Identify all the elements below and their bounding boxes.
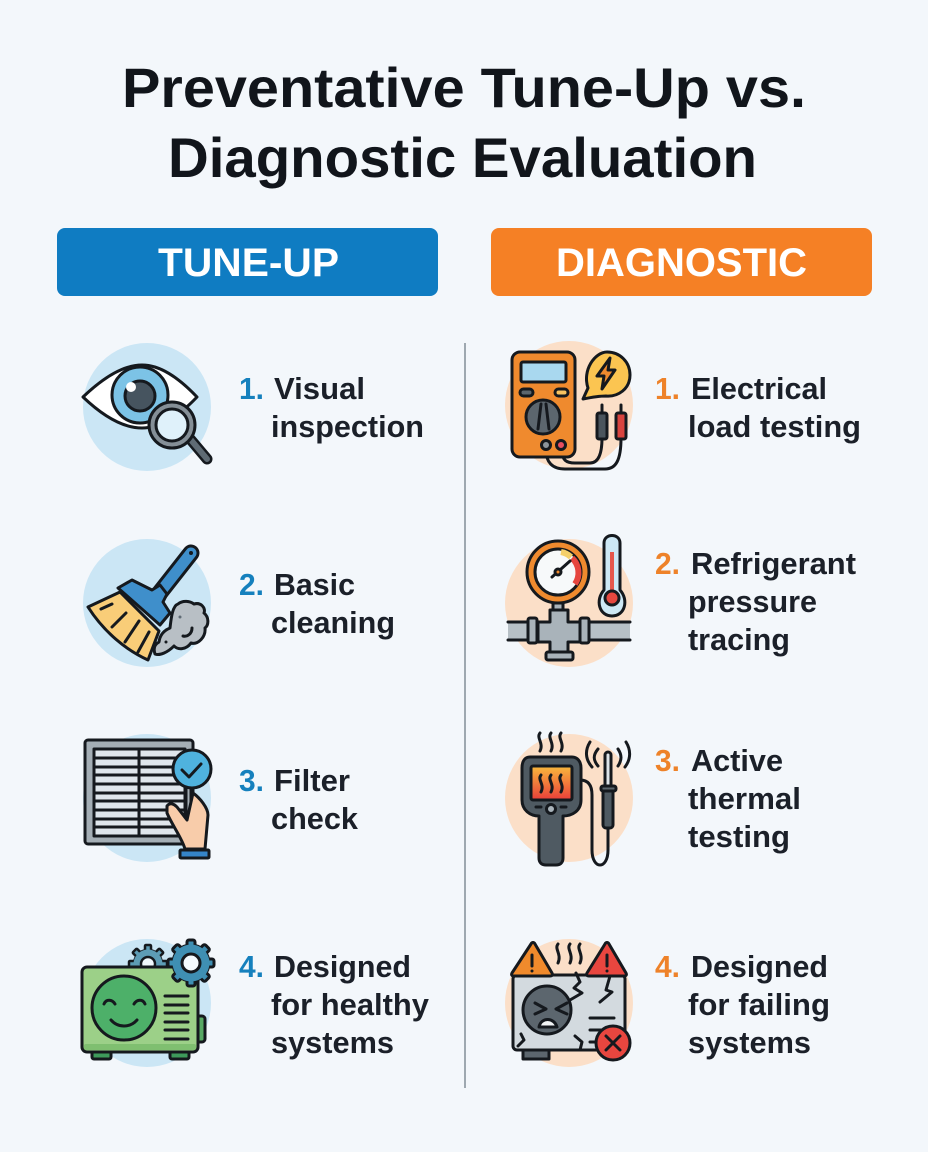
text: tune-up item 2: Basic <box>274 567 355 602</box>
header: diagnostic <box>491 228 872 296</box>
text: tune-up item 4: Designed <box>274 949 411 984</box>
text: tune-up item 3 <box>239 763 359 836</box>
icon: multimeter <box>505 341 633 469</box>
text: diagnostic item 4 <box>655 949 830 1060</box>
icon: filter check <box>83 734 211 862</box>
text: diagnostic item 1: 1. <box>655 371 680 406</box>
text: diagnostic item 2 <box>655 546 856 657</box>
text: tune-up item 1: Visual <box>274 371 365 406</box>
text: tune-up item 1 <box>239 371 424 444</box>
icon: eye with magnifier <box>83 343 211 471</box>
header: tune-up <box>57 228 438 296</box>
icon: pressure gauge and thermometer <box>505 536 633 667</box>
text: diagnostic item 3: Active <box>691 743 783 778</box>
text: tune-up item 4 <box>239 949 430 1060</box>
text: diagnostic item 3 <box>655 743 801 854</box>
text: diagnostic item 4: systems <box>688 1025 811 1060</box>
icon: failing unit with warnings <box>505 939 633 1067</box>
text: tune-up item 3: 3. <box>239 763 264 798</box>
text: diagnostic item 2: tracing <box>688 622 790 657</box>
text: tune-up item 4: 4. <box>239 949 264 984</box>
text: tune-up item 2: 2. <box>239 567 264 602</box>
text: tune-up item 2: cleaning <box>271 605 395 640</box>
icon: broom and dust <box>83 539 211 667</box>
icon: healthy unit <box>82 939 214 1067</box>
text: diagnostic item 3: testing <box>688 819 790 854</box>
text: tune-up item 2 <box>239 567 395 640</box>
text: tune-up item 4: for healthy <box>271 987 430 1022</box>
header: tune-up: TUNE-UP <box>158 241 339 285</box>
text: diagnostic item 2: 2. <box>655 546 680 581</box>
text: tune-up item 1: 1. <box>239 371 264 406</box>
header: diagnostic: DIAGNOSTIC <box>556 241 807 285</box>
text: diagnostic item 1: Electrical <box>691 371 827 406</box>
text: diagnostic item 4: Designed <box>691 949 828 984</box>
title: Preventative Tune-Up vs. <box>122 56 806 119</box>
text: diagnostic item 2: Refrigerant <box>691 546 856 581</box>
text: diagnostic item 4: for failing <box>688 987 830 1022</box>
text: tune-up item 3: Filter <box>274 763 350 798</box>
text: diagnostic item 4: 4. <box>655 949 680 984</box>
text: tune-up item 4: systems <box>271 1025 394 1060</box>
text: diagnostic item 2: pressure <box>688 584 817 619</box>
title: Diagnostic Evaluation <box>168 126 757 189</box>
text: tune-up item 3: check <box>271 801 359 836</box>
text: diagnostic item 1: load testing <box>688 409 861 444</box>
text: diagnostic item 3: thermal <box>688 781 801 816</box>
title <box>122 56 806 189</box>
icon: thermal camera and probe <box>505 733 633 865</box>
text: diagnostic item 3: 3. <box>655 743 680 778</box>
text: tune-up item 1: inspection <box>271 409 424 444</box>
text: diagnostic item 1 <box>655 371 861 444</box>
